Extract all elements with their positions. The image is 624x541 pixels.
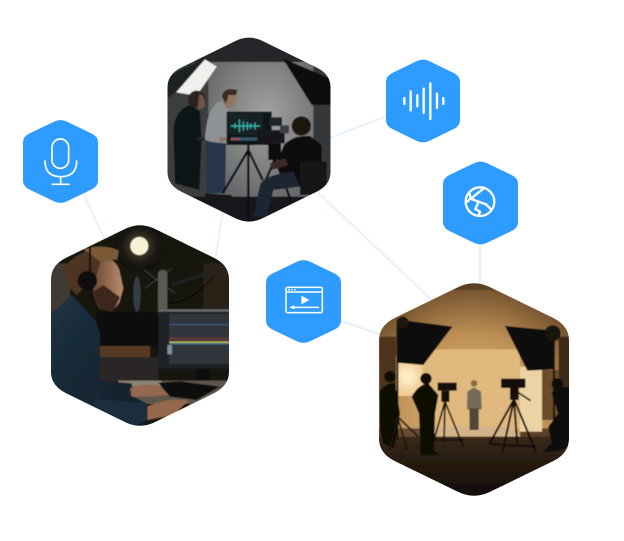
wall panel right	[203, 263, 230, 310]
hexagon network diagram	[23, 38, 569, 496]
seated man	[253, 116, 327, 217]
left wall	[168, 94, 206, 196]
man middle	[205, 89, 237, 202]
camera	[253, 117, 291, 210]
softbox right	[283, 58, 333, 105]
left wall	[50, 263, 70, 313]
man left	[173, 90, 206, 190]
softbox right	[505, 326, 554, 371]
floor	[192, 196, 308, 222]
softbox left	[397, 319, 452, 365]
icon hexagon: sound waveform	[386, 60, 460, 142]
icon: video player window	[286, 287, 322, 313]
wood strip	[100, 346, 150, 357]
tripod	[223, 145, 263, 222]
icon hexagon: microphone	[23, 120, 98, 203]
microphone	[133, 268, 217, 316]
desk	[118, 381, 232, 404]
back wall	[208, 62, 313, 198]
left edge person	[379, 371, 418, 450]
ceiling	[194, 38, 306, 63]
keyboard	[158, 381, 220, 400]
floor	[379, 436, 568, 496]
softbox left	[176, 59, 217, 96]
photo hexagon: crew with camera and waveform monitor	[168, 38, 330, 222]
photo hexagon: man with headphones at studio desk	[51, 225, 229, 426]
center talent	[467, 380, 482, 430]
man body	[50, 295, 147, 427]
icon: microphone	[45, 139, 77, 184]
icon hexagon: video player	[266, 260, 341, 343]
rug	[433, 427, 521, 437]
operator left	[412, 373, 439, 455]
ceiling	[452, 283, 496, 290]
right edge person	[543, 378, 570, 452]
photo hexagon: warm film studio with cameras	[379, 283, 569, 496]
lamp	[125, 232, 153, 260]
icon hexagon: globe	[443, 162, 518, 244]
icon: globe	[466, 187, 494, 216]
monitor with waveform	[227, 112, 272, 145]
back wall	[420, 349, 520, 429]
left camera and tripod	[434, 383, 463, 447]
connector lines	[84, 114, 480, 336]
icon: waveform bars	[404, 83, 443, 119]
foam panel	[97, 312, 160, 347]
right camera and tripod	[489, 379, 536, 452]
head	[64, 243, 123, 312]
lit panels	[394, 356, 422, 396]
hands	[130, 385, 188, 420]
monitor	[158, 309, 230, 383]
